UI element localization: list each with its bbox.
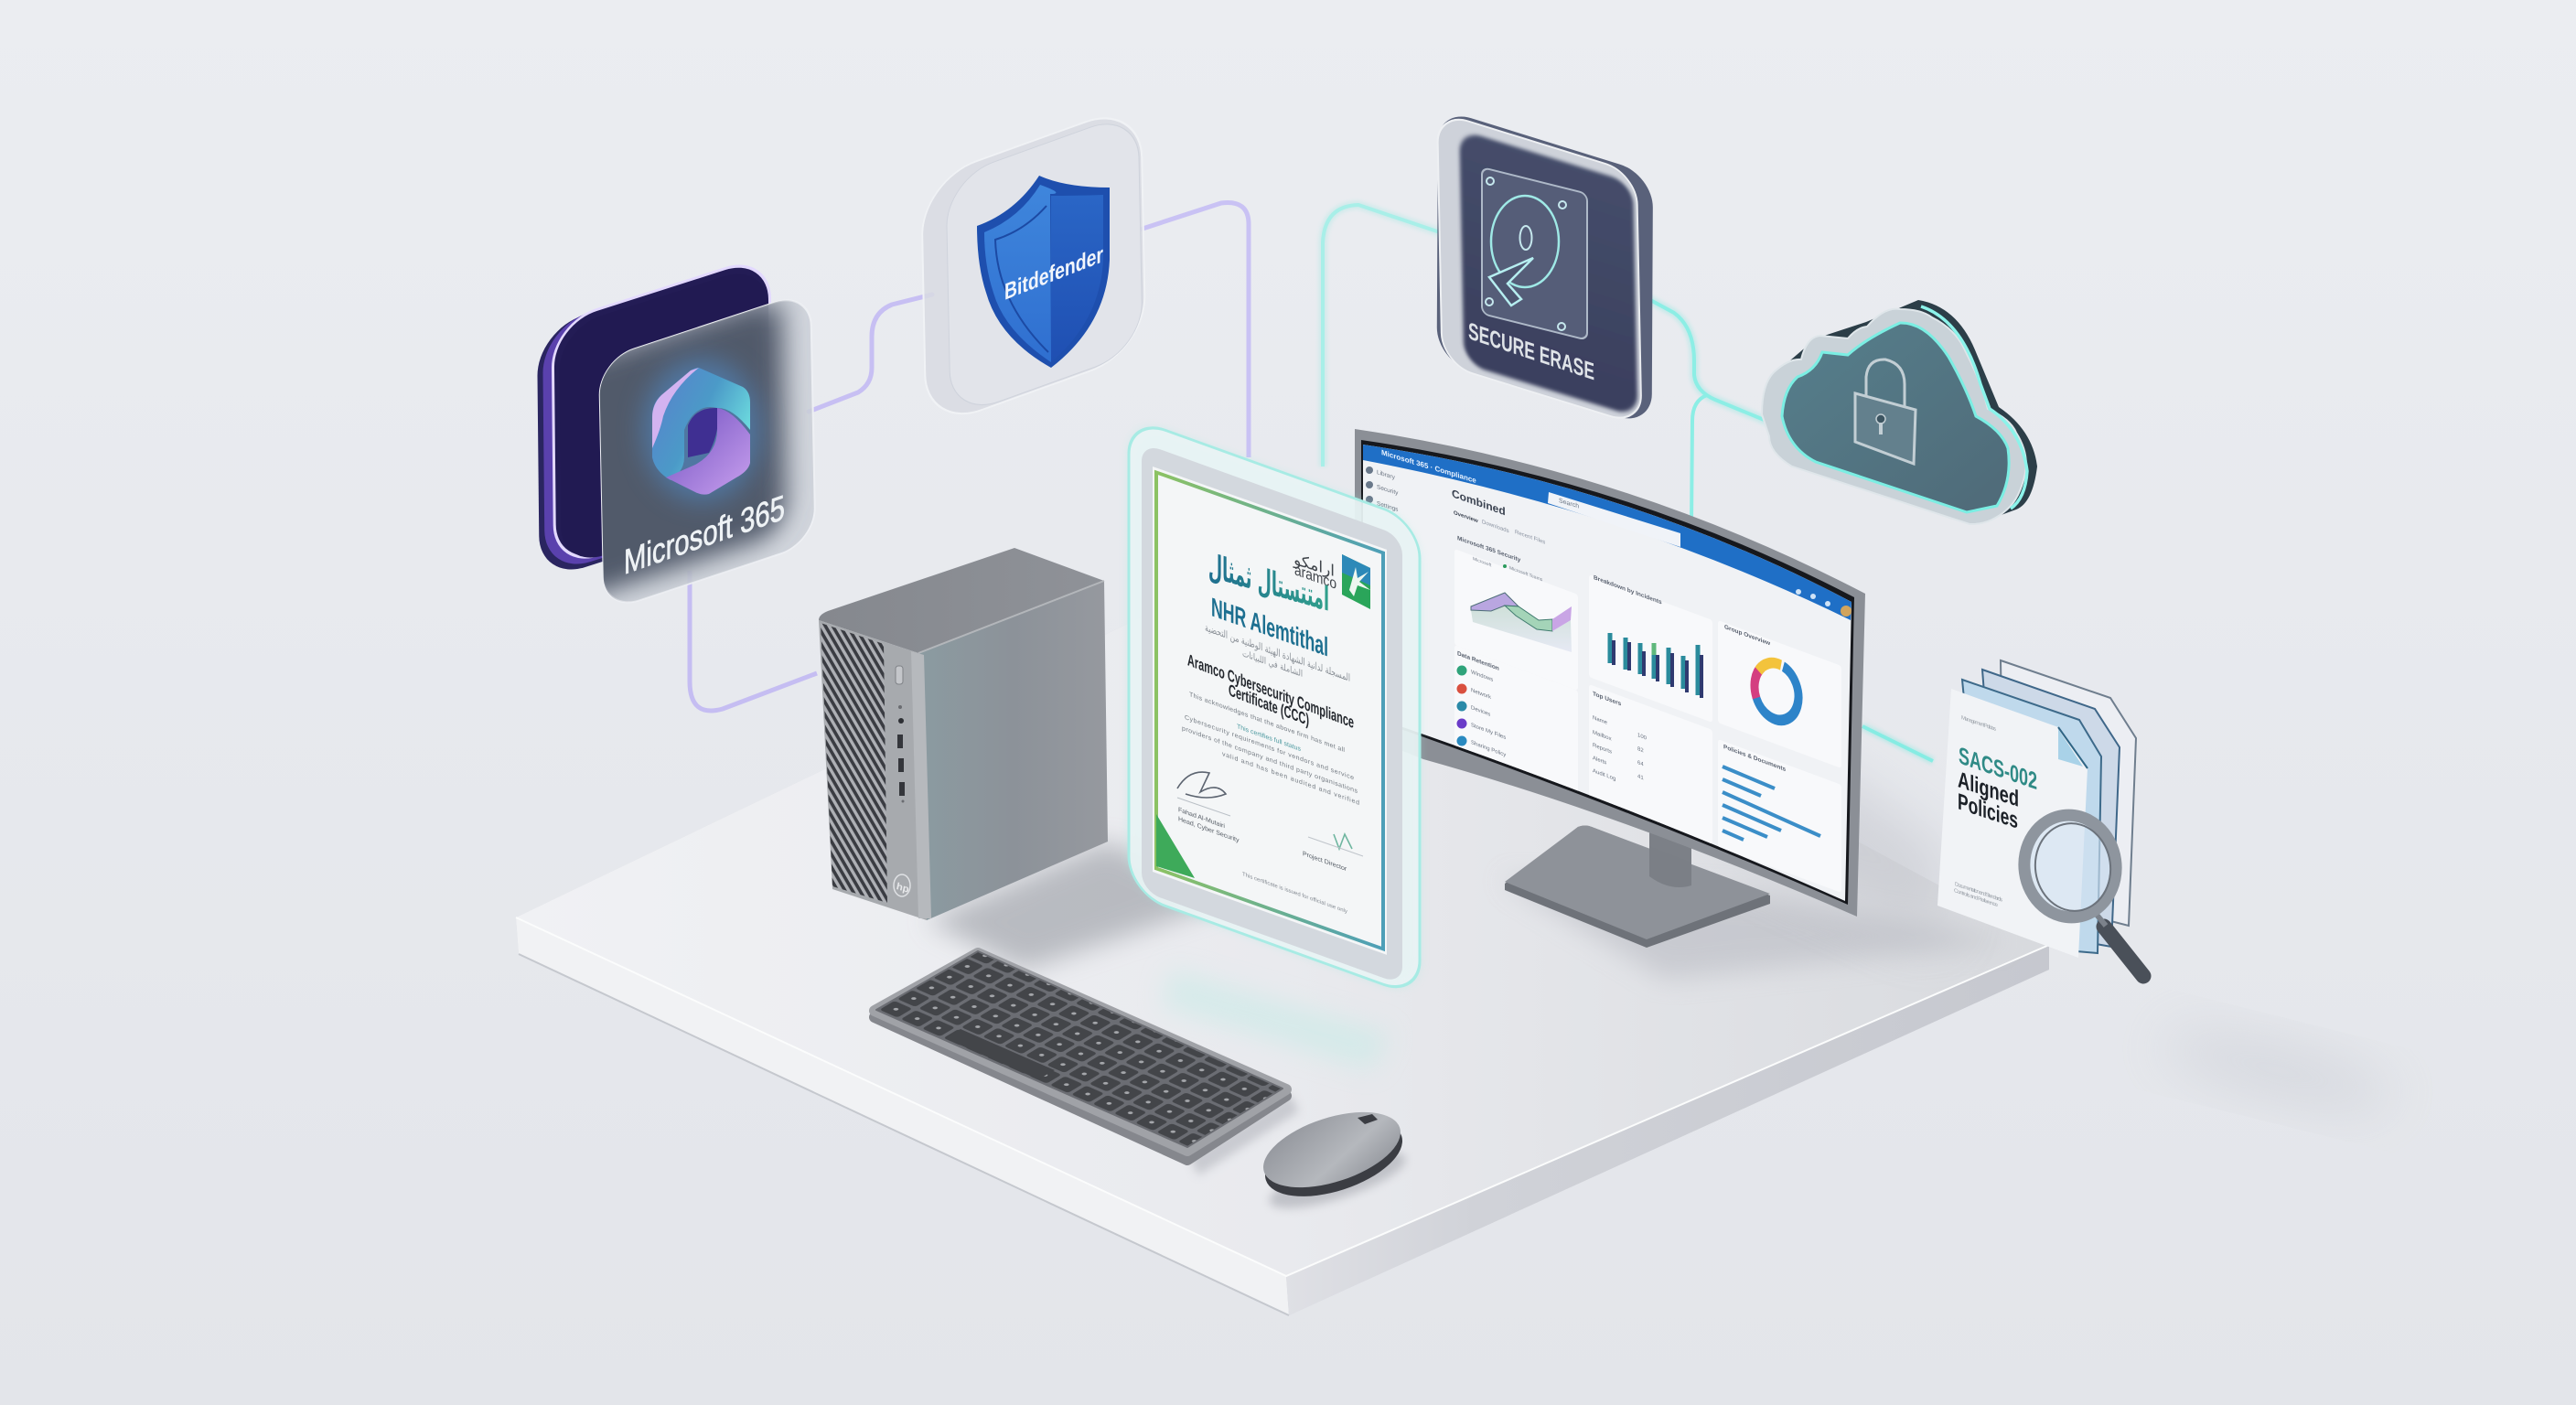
panel: list: Store My Files	[1471, 722, 1506, 741]
keyboard	[875, 951, 1286, 1160]
document fine print: Documentation and Standards	[1955, 881, 2002, 904]
panel: list: Data Retention	[1457, 650, 1499, 672]
signatures: Project Director	[1303, 849, 1347, 873]
document fine print: Management Policies	[1961, 714, 1996, 733]
plate	[1437, 108, 1653, 427]
panel: table: Name	[1593, 714, 1608, 726]
connector: Microsoft 365 to PC tower	[690, 571, 817, 711]
tower vent	[821, 623, 887, 903]
document stack: SACS-002 Aligned Policies	[1937, 660, 2143, 976]
title bar: Microsoft 365 · Compliance	[1381, 448, 1476, 485]
panel: table: Mailbox	[1593, 729, 1613, 743]
certificate title: امتتستال ثمثال	[1208, 545, 1329, 619]
signatures: Fahad Al-Mutairi	[1178, 805, 1225, 830]
aramco logo: aramco	[1294, 560, 1336, 593]
card: Microsoft 365	[537, 254, 816, 612]
panel: area chart	[1471, 556, 1572, 651]
label: Bitdefender: Bitdefender	[1004, 242, 1103, 306]
panel: table: 41	[1637, 773, 1644, 782]
dashboard heading: Microsoft 365 Security	[1457, 535, 1521, 563]
monitor	[1354, 429, 1866, 917]
sidebar: Settings	[1377, 500, 1399, 513]
sidebar: Library	[1377, 469, 1395, 481]
platform	[516, 541, 2049, 1315]
card: Secure Erase	[1437, 108, 1653, 427]
dashboard heading: Combined	[1452, 487, 1506, 518]
panel: bar chart: Breakdown by Incidents	[1594, 574, 1662, 606]
cloud glass	[1762, 309, 2026, 524]
aramco logo	[1293, 551, 1370, 609]
floor shadow to the right of the platform	[2157, 1018, 2399, 1122]
connector: Secure Erase to cloud and monitor	[1635, 289, 1773, 526]
panel: table: Alerts	[1593, 755, 1606, 767]
document fine print	[1954, 714, 2002, 908]
certificate body: This certifies full status	[1237, 722, 1301, 753]
certificate title: NHR Alemtithal	[1211, 593, 1328, 663]
cloud inner	[1782, 323, 2009, 512]
panel: table: 100	[1637, 732, 1648, 742]
front page	[1937, 689, 2088, 958]
dashboard heading	[1452, 487, 1545, 563]
hp logo: hp	[896, 881, 909, 896]
panel: table: Top Users	[1593, 691, 1621, 708]
document title: SACS-002	[1959, 742, 2037, 795]
panel: table: 64	[1637, 759, 1644, 768]
glass face	[598, 300, 814, 602]
panel: list: Devices	[1471, 704, 1490, 718]
signatures: Head, Cyber Security	[1178, 814, 1240, 844]
tower ports	[896, 666, 905, 803]
certificate body: valid and has been audited and verified	[1222, 749, 1359, 807]
mouse	[1254, 1098, 1411, 1211]
logo: Microsoft 365	[643, 359, 760, 501]
sidebar: Security	[1377, 484, 1399, 497]
panel: area chart: Microsoft Teams	[1509, 565, 1543, 583]
panel: area chart: Microsoft	[1473, 556, 1492, 569]
connector: monitor to policies	[1862, 726, 1933, 761]
back plate	[537, 254, 772, 582]
PC tower	[819, 548, 1108, 920]
panel: list: Network	[1471, 687, 1492, 701]
certificate body: providers of the company and third party organisations	[1182, 724, 1358, 795]
dashboard heading: Recent Files	[1515, 529, 1545, 546]
certificate body	[1182, 622, 1359, 807]
panel: donut chart: Group Overview	[1724, 624, 1771, 648]
label: Secure Erase: SECURE ERASE	[1468, 317, 1594, 385]
certificate body: المسجلة لدانية الشهادة الهيئة الوطنية من التحضية	[1205, 622, 1350, 684]
panel: table	[1589, 684, 1712, 844]
document title: Policies	[1958, 789, 2018, 834]
document title: Aligned	[1958, 767, 2019, 812]
hp logo	[894, 874, 910, 896]
icon: cloud with lock	[1762, 300, 2037, 524]
icon: magnifying glass	[2018, 810, 2143, 976]
back pages	[1962, 660, 2136, 953]
cloud neon edge	[1921, 306, 2027, 509]
certificate body: This acknowledges that the above firm has met all	[1189, 690, 1345, 754]
panel: list: Windows	[1471, 669, 1493, 683]
lock	[1855, 359, 1916, 464]
icon: hard drive	[1482, 167, 1587, 340]
dashboard heading: Overview	[1454, 509, 1478, 524]
label: Microsoft 365: Microsoft 365	[624, 488, 785, 583]
aramco logo: ارامكو	[1293, 551, 1335, 581]
connector: certificate to Secure Erase	[1323, 205, 1443, 467]
panel: table: Audit Log	[1593, 767, 1616, 782]
panel: horizontal bars: Policies & Documents	[1723, 744, 1786, 773]
title bar: Search	[1559, 497, 1579, 510]
panel: list	[1454, 645, 1578, 796]
platform soft shadows	[927, 640, 2012, 1219]
glass plate	[921, 102, 1145, 430]
panel: table: 82	[1637, 745, 1644, 755]
panel: table: Reports	[1593, 742, 1612, 756]
signatures: This certificate is issued for official use only	[1242, 871, 1348, 916]
panel: bar chart	[1594, 574, 1703, 698]
certificate body: Cybersecurity requirements for vendors and service	[1185, 713, 1354, 782]
certificate title	[1208, 545, 1329, 663]
document title	[1958, 742, 2037, 834]
monitor stand	[1505, 823, 1770, 948]
certificate body: Aramco Cybersecurity Compliance	[1187, 650, 1354, 732]
card: Bitdefender	[921, 102, 1145, 430]
panel: list: Sharing Policy	[1471, 739, 1507, 758]
shield	[977, 176, 1110, 368]
title bar	[1363, 445, 1852, 620]
panel: donut chart	[1724, 625, 1803, 726]
sidebar	[1366, 467, 1399, 513]
dashboard heading: Downloads	[1482, 519, 1509, 534]
monitor screen	[1363, 445, 1852, 901]
certificate panel	[1129, 417, 1420, 997]
panel: horizontal bars	[1719, 745, 1821, 855]
certificate body: الشاملة في اللبيانات	[1242, 648, 1303, 680]
connector: Bitdefender to certificate	[1140, 202, 1249, 457]
cloud back	[1784, 300, 2037, 524]
signatures	[1177, 772, 1363, 916]
connector: Microsoft 365 to Bitdefender	[809, 295, 932, 412]
certificate body: Certificate (CCC)	[1229, 681, 1309, 729]
document fine print: Controls and Reference	[1954, 887, 1999, 908]
certificate paper	[1153, 467, 1387, 955]
